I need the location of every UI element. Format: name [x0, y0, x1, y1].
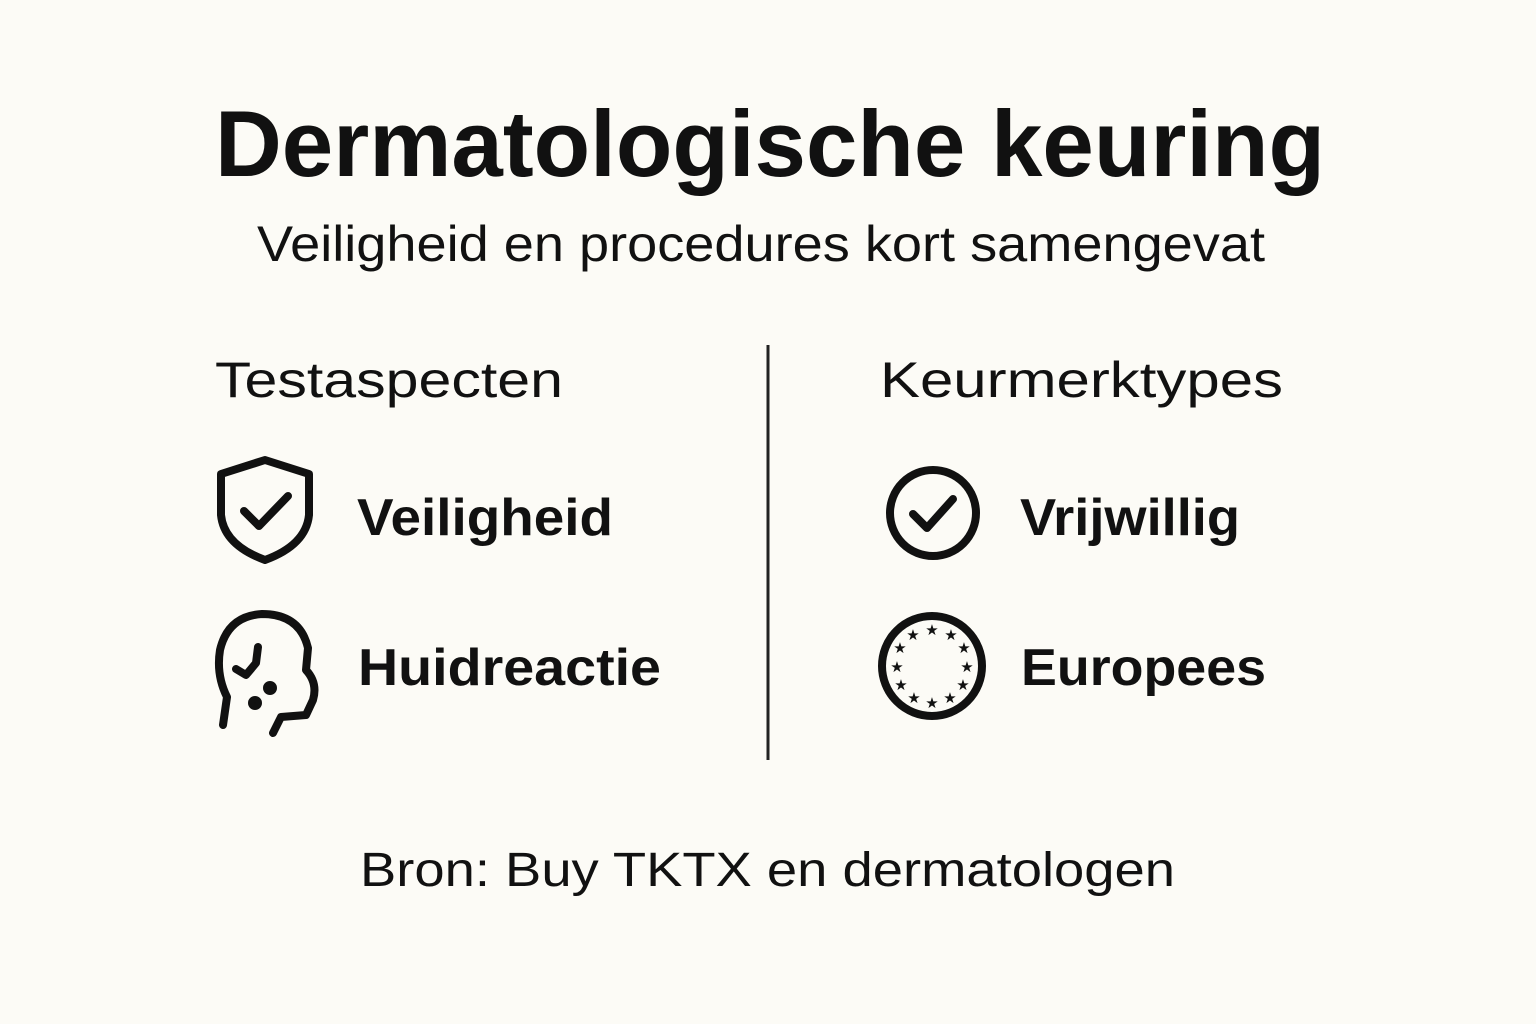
label: Veiligheid: Veiligheid	[357, 489, 613, 547]
icon: EU stars: ★	[960, 659, 974, 676]
icon: EU stars: ★	[925, 622, 939, 639]
divider	[766, 345, 770, 760]
icon: EU stars: ★	[894, 677, 908, 694]
label: Vrijwillig: Vrijwillig	[1020, 489, 1240, 547]
source: Bron: Buy TKTX en dermatologen	[360, 844, 1175, 897]
title: Dermatologische keuring	[215, 91, 1325, 196]
icon: EU stars: ★	[890, 659, 904, 676]
icon: EU stars: ★	[943, 690, 957, 707]
icon: head with skin reaction	[219, 614, 314, 733]
subtitle: Veiligheid en procedures kort samengevat	[257, 216, 1265, 272]
icon: EU stars: ★	[944, 627, 958, 644]
icon: EU stars: ★	[893, 640, 907, 657]
panel: testaspecten	[215, 352, 661, 733]
icon: EU stars: ★	[957, 640, 971, 657]
icon: shield check	[221, 460, 309, 560]
panel: keurmerktypes	[880, 352, 1283, 716]
heading: Keurmerktypes: Keurmerktypes	[880, 352, 1283, 408]
icon: EU stars: ★	[956, 677, 970, 694]
icon: EU stars	[882, 616, 982, 716]
icon: EU stars: ★	[925, 695, 939, 712]
icon: EU stars: ★	[907, 690, 921, 707]
icon: EU stars: ★	[906, 627, 920, 644]
heading: Testaspecten: Testaspecten	[215, 352, 563, 408]
label: Europees: Europees	[1021, 639, 1266, 697]
label: Huidreactie: Huidreactie	[358, 639, 661, 697]
icon: check circle	[890, 470, 976, 556]
